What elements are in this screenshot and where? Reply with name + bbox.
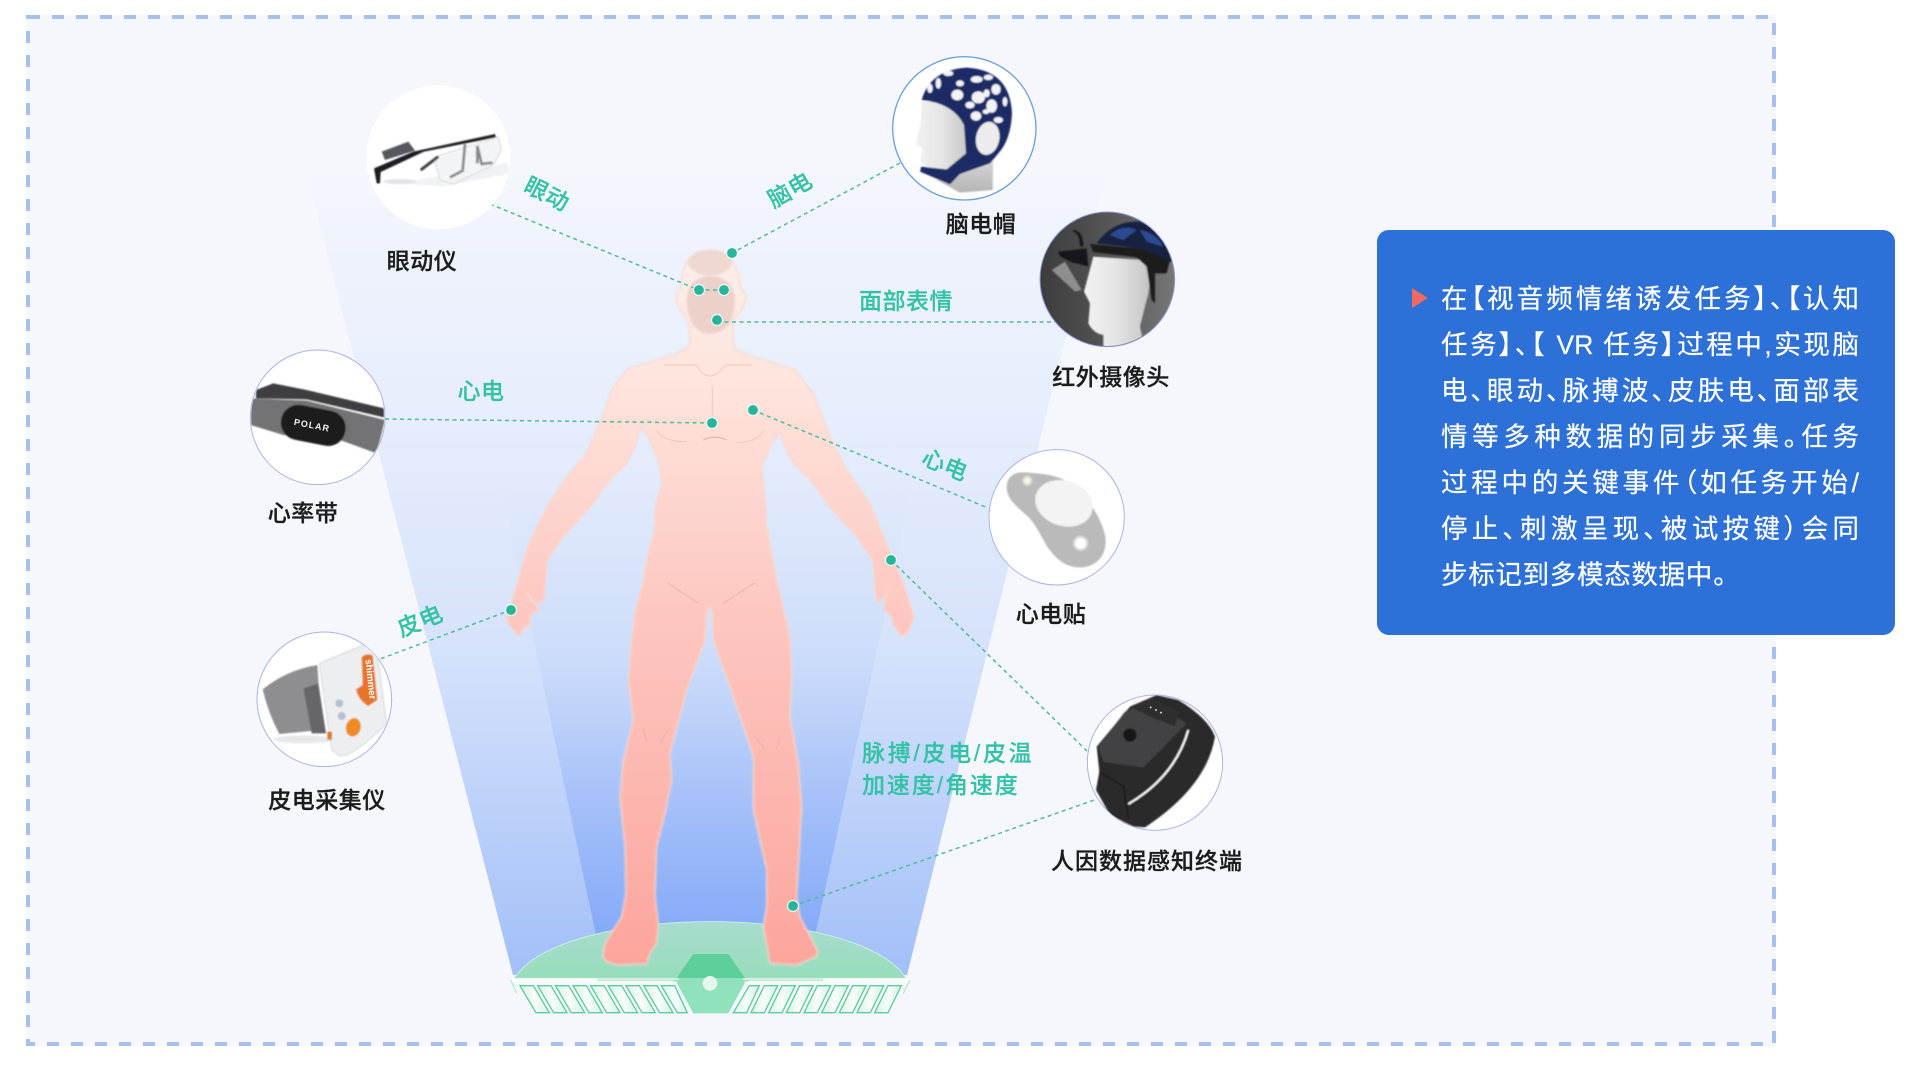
label: 眼动仪: 眼动仪 (387, 248, 457, 274)
label: 红外摄像头: 红外摄像头 (1052, 364, 1170, 390)
light beams over body (306, 170, 1107, 975)
signal label: 皮电: 皮电 (393, 600, 447, 642)
callout text: 过程中的关键事件（如任务开始/ (1441, 468, 1859, 498)
device: skin conductance sensor (257, 632, 392, 767)
device: skin conductance sensor: shimmer (362, 659, 378, 700)
device: human factors wristband (1087, 695, 1223, 830)
callout: blue description box (1377, 230, 1895, 635)
signal label: 脑电: 脑电 (763, 167, 817, 213)
device: EEG cap (893, 57, 1036, 200)
callout text: 停止、刺激呈现、被试按键）会同 (1441, 514, 1859, 544)
callout text: 在【视音频情绪诱发任务】、【认知 (1441, 284, 1859, 314)
sensor points on body (506, 248, 896, 912)
callout text: 步标记到多模态数据中。 (1441, 560, 1727, 590)
label: 心电贴: 心电贴 (1016, 601, 1086, 627)
platform (510, 922, 911, 1013)
signal label: 心电 right: 心电 (918, 444, 972, 486)
signal label: wristband channels (862, 740, 1034, 798)
label: 心率带: 心率带 (268, 500, 338, 526)
callout text: 电、眼动、脉搏波、皮肤电、面部表 (1441, 376, 1859, 406)
callout text: 情等多种数据的同步采集。任务 (1441, 422, 1859, 452)
device: eye tracker (366, 85, 510, 229)
human body figure (506, 250, 914, 965)
label: 脑电帽: 脑电帽 (946, 211, 1016, 237)
signal label: wristband channels: 脉搏/皮电/皮温 (862, 740, 1034, 766)
callout text: 任务】、【 VR 任务】过程中,实现脑 (1441, 330, 1859, 360)
signal label: 面部表情: 面部表情 (859, 288, 953, 314)
label: 人因数据感知终端: 人因数据感知终端 (1051, 848, 1243, 874)
signal label: 心电 left: 心电 (458, 378, 504, 404)
device: infrared camera headset (1040, 212, 1175, 350)
device: ECG patch (989, 450, 1124, 585)
device: heart rate belt (250, 350, 385, 485)
callout text (1441, 284, 1860, 590)
icon: red triangle bullet (1412, 288, 1428, 308)
device: heart rate belt: POLAR (293, 417, 331, 434)
label: 皮电采集仪: 皮电采集仪 (268, 787, 386, 813)
leader lines (380, 163, 1097, 906)
signal label: 眼动: 眼动 (520, 172, 574, 216)
signal label: wristband channels: 加速度/角速度 (862, 772, 1020, 798)
